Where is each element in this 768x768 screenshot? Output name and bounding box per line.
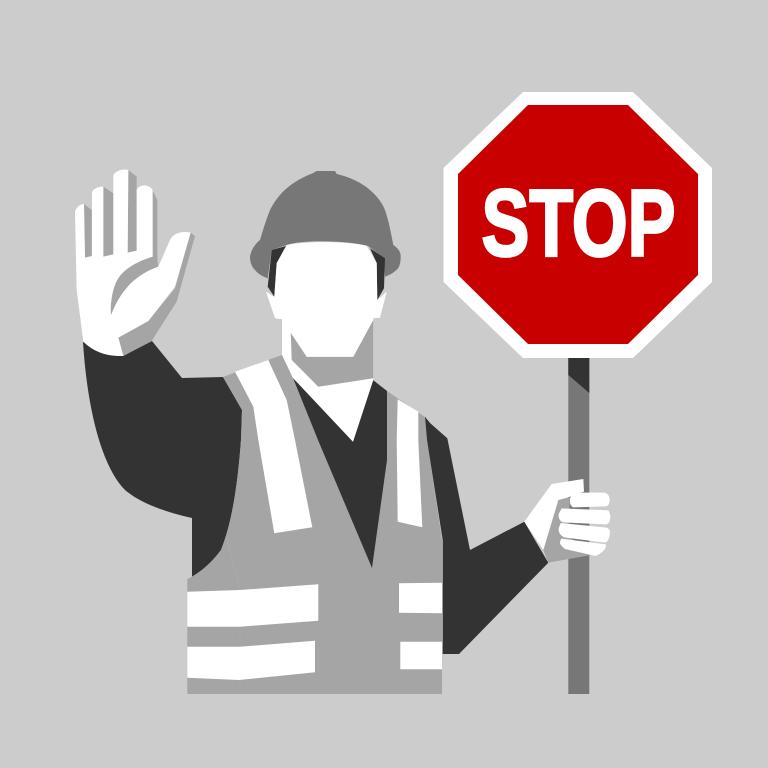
vest seams <box>226 537 240 694</box>
raised hand <box>75 170 195 356</box>
lowered arm <box>425 417 548 654</box>
left shoulder strap <box>235 360 312 533</box>
fingers <box>559 493 610 556</box>
hair <box>268 246 385 300</box>
neck shadow <box>291 320 373 387</box>
hand palm <box>75 170 191 356</box>
torso: vest <box>187 355 442 694</box>
neck <box>282 315 373 442</box>
hand on post <box>524 479 610 563</box>
hand shadow <box>84 170 195 356</box>
stop sign <box>444 92 712 358</box>
vest reflective stripes right <box>399 583 442 613</box>
face <box>266 242 387 357</box>
signpost <box>568 357 589 694</box>
wrist and thumb <box>524 479 584 550</box>
helmet <box>250 171 401 278</box>
vest reflective stripes left <box>187 584 318 627</box>
worker's raised arm <box>83 341 242 577</box>
sign text: STOP <box>482 170 675 276</box>
right shoulder strap <box>397 399 422 527</box>
palm shadow <box>543 497 597 563</box>
dark shirt V <box>293 378 387 568</box>
